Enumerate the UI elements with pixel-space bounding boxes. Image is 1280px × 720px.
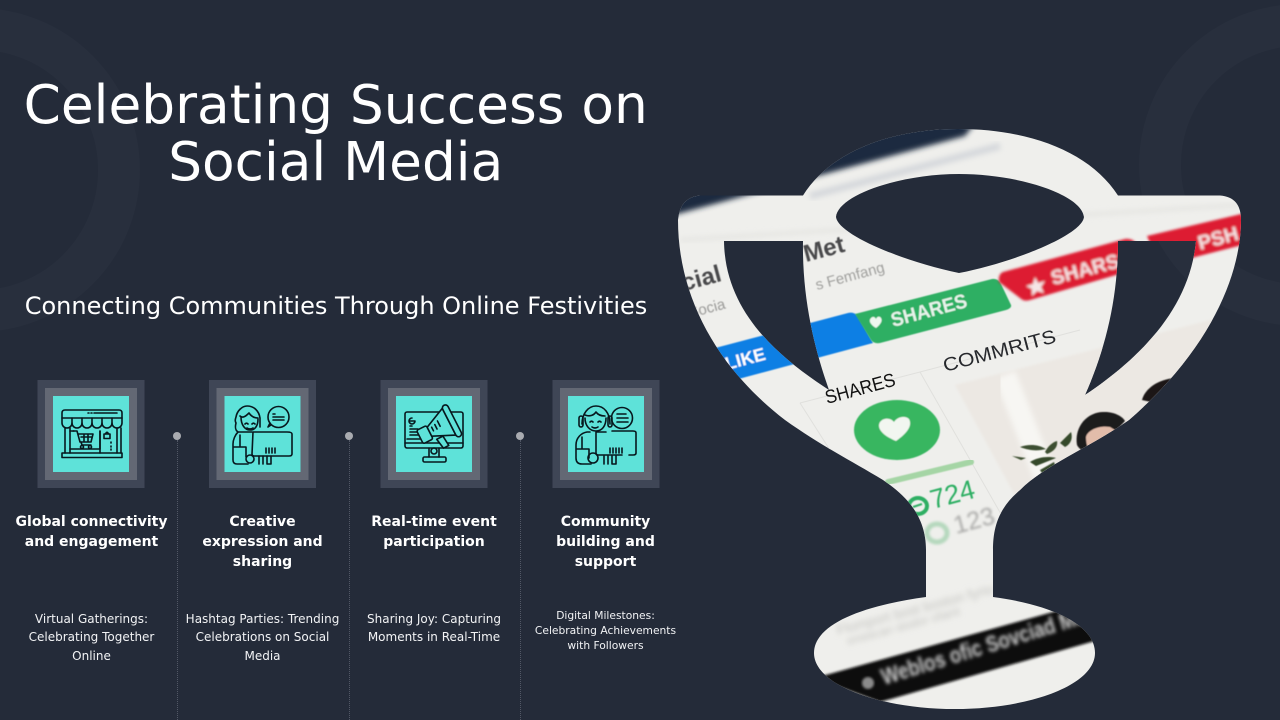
text block 1 bbox=[29, 612, 154, 663]
icon: woman sharing bbox=[209, 380, 316, 488]
blurred header text bbox=[686, 236, 885, 316]
blue like button: LIKE bbox=[723, 344, 768, 374]
text block 4: Celebrating Achievements bbox=[535, 624, 676, 637]
text block 2: Celebrations on Social bbox=[196, 630, 329, 644]
title: Celebrating Success on bbox=[24, 74, 648, 136]
timeline line 1 bbox=[177, 440, 178, 720]
title: Social Media bbox=[168, 131, 503, 193]
timeline line 2 bbox=[348, 440, 350, 720]
heading 1: and engagement bbox=[25, 534, 158, 550]
title bbox=[24, 74, 648, 193]
red shares buttons: PSH bbox=[1196, 223, 1241, 255]
green progress bar bbox=[888, 462, 971, 482]
card labels: COMMRITS bbox=[941, 327, 1058, 377]
black footer band: Weblos ofic Sovciad Ma bbox=[878, 603, 1088, 690]
divider dot 2 bbox=[344, 432, 352, 440]
heading 1 bbox=[16, 514, 168, 550]
green heart badge bbox=[854, 400, 940, 460]
heading 1: Global connectivity bbox=[16, 514, 167, 530]
stats: 724 bbox=[927, 474, 978, 515]
heading 3 bbox=[371, 514, 497, 550]
blurred header text: cial M bbox=[679, 253, 750, 297]
text block 4 bbox=[535, 609, 676, 652]
heading 4: building and bbox=[556, 534, 655, 550]
blurred header text: Met bbox=[801, 231, 847, 268]
black footer band bbox=[824, 610, 1093, 702]
trophy photo bbox=[678, 129, 1241, 709]
text block 3: Moments in Real-Time bbox=[368, 630, 500, 644]
woman and plant in photo bbox=[1012, 378, 1172, 473]
blurred footer text: onsiscan stodor ofaint bbox=[845, 604, 962, 648]
heading 3: participation bbox=[383, 534, 485, 550]
text block 2: Hashtag Parties: Trending bbox=[186, 612, 339, 626]
blurred header text: Socia bbox=[687, 296, 728, 322]
icon: online store bbox=[38, 380, 144, 488]
divider dot 1 bbox=[173, 432, 181, 440]
green shares button bbox=[855, 279, 1011, 343]
trophy photo: SHARES bbox=[823, 370, 898, 409]
blue like button bbox=[716, 312, 874, 379]
text block 1: Online bbox=[72, 649, 111, 663]
red shares buttons: SHARS bbox=[1049, 250, 1122, 290]
text block 4: Digital Milestones: bbox=[556, 609, 655, 622]
heading 3: Real-time event bbox=[371, 514, 497, 530]
divider dot 3 bbox=[516, 432, 524, 440]
photo panel bbox=[958, 318, 1214, 496]
icon: community support agent bbox=[552, 380, 660, 488]
text block 4: with Followers bbox=[567, 639, 644, 652]
text block 2: Media bbox=[244, 649, 281, 663]
text block 2 bbox=[186, 612, 339, 663]
blurred footer text: Flomport bost boston fyrio bbox=[835, 580, 995, 638]
text block 1: Celebrating Together bbox=[29, 630, 154, 644]
text block 1: Virtual Gatherings: bbox=[35, 612, 148, 626]
heading 2: Creative bbox=[229, 514, 296, 530]
heading 2: sharing bbox=[233, 554, 292, 570]
blurred header text: s Femfang bbox=[814, 259, 886, 294]
heading 4 bbox=[556, 514, 655, 570]
text block 3 bbox=[367, 612, 501, 644]
card outlines bbox=[800, 330, 1080, 514]
heading 4: Community bbox=[561, 514, 650, 530]
heading 4: support bbox=[575, 554, 636, 570]
heading 2: expression and bbox=[202, 534, 323, 550]
dark top band bbox=[678, 129, 976, 218]
heading 2 bbox=[202, 514, 323, 570]
text block 3: Sharing Joy: Capturing bbox=[367, 612, 501, 626]
green shares button: SHARES bbox=[889, 290, 970, 332]
subtitle: Connecting Communities Through Online Festivities bbox=[25, 292, 647, 320]
timeline line 3 bbox=[520, 440, 521, 720]
red shares buttons bbox=[999, 212, 1250, 301]
icon: marketing megaphone bbox=[380, 380, 488, 488]
trophy photo: 123 bbox=[950, 502, 998, 540]
